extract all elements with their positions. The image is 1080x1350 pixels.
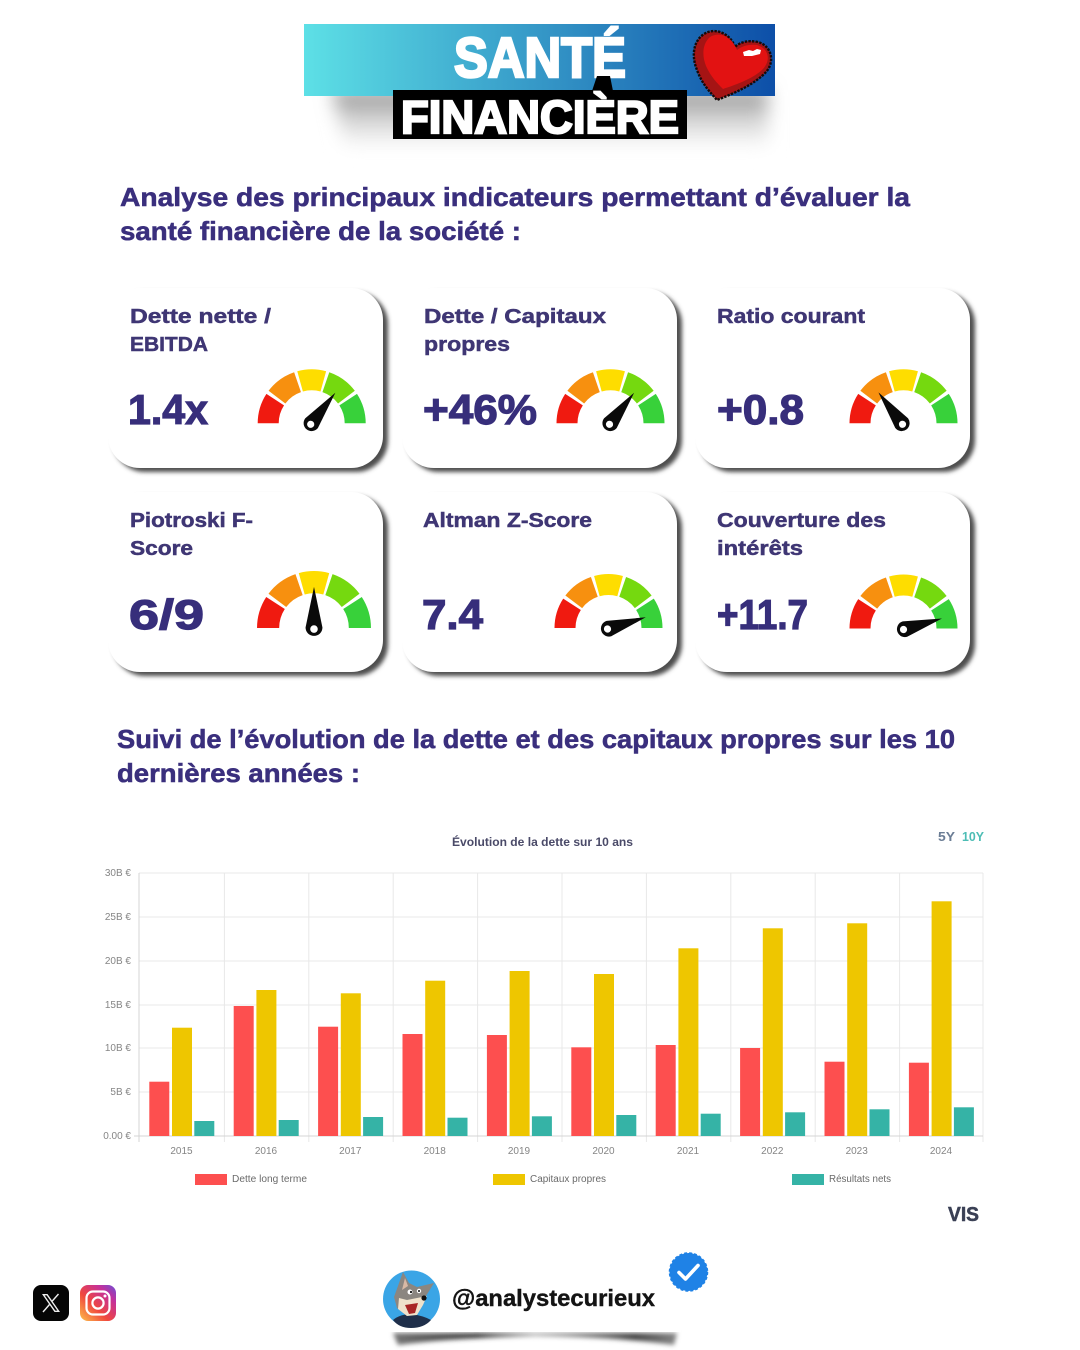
icon: X: [33, 1285, 69, 1321]
panel: Piotroski F-Score: Piotroski F-: [130, 509, 253, 532]
gauge: Dette nette / EBITDA: [268, 380, 355, 434]
heading: analysis intro: Analyse des principaux indicateurs permettant d’évaluer la: [120, 182, 911, 212]
panel: Piotroski F-Score: Score: [130, 537, 193, 560]
y axis labels: 5B €: [110, 1087, 131, 1098]
panel: Piotroski F-Score: 6/9: [129, 591, 204, 638]
panel: Ratio courant: +0.8: [717, 386, 804, 433]
gauge: Piotroski F-Score: [268, 582, 360, 636]
icon: pixel heart: [694, 31, 771, 100]
title word: FINANCIÈRE: FINANCIÈRE: [401, 91, 679, 143]
heading: debt evolution: dernières années :: [117, 758, 360, 788]
x axis labels: 2018: [424, 1146, 446, 1157]
panel: Dette nette / EBITDA: Dette nette /: [130, 305, 271, 328]
panel: Dette nette / EBITDA: 1.4x: [128, 386, 208, 433]
y axis labels: 20B €: [105, 956, 131, 967]
legend: Capitaux propres: [530, 1174, 606, 1185]
y axis labels: [103, 868, 131, 1142]
gauge: Ratio courant: [860, 380, 947, 434]
y axis labels: 30B €: [105, 868, 131, 879]
handle: @analystecurieux: [452, 1285, 655, 1311]
panel: Couverture des intérêts: Couverture des: [717, 509, 886, 532]
legend: [195, 1174, 891, 1185]
panel: Dette / Capitaux propres: [402, 288, 682, 472]
panel: Dette / Capitaux propres: Dette / Capitaux: [424, 305, 607, 328]
panel: Couverture des intérêts: +11.7: [717, 591, 808, 638]
x axis labels: 2016: [255, 1146, 278, 1157]
icon: Instagram: [80, 1285, 116, 1321]
panel: Ratio courant: Ratio courant: [717, 305, 865, 328]
x axis labels: 2022: [761, 1146, 784, 1157]
x axis labels: 2021: [677, 1146, 700, 1157]
y axis labels: 15B €: [105, 1000, 131, 1011]
footer shadow: [393, 1333, 677, 1345]
series: Dette long terme: [149, 1006, 929, 1136]
title banner: [304, 24, 775, 148]
panel: Couverture des intérêts: [695, 492, 975, 676]
ticker label: VIS: [948, 1204, 979, 1226]
panel: Dette nette / EBITDA: EBITDA: [130, 333, 208, 356]
panel: Altman Z-Score: Altman Z-Score: [423, 509, 592, 532]
panel: Dette / Capitaux propres: propres: [424, 333, 510, 356]
title word: SANTÉ: SANTÉ: [454, 26, 626, 90]
series: Résultats nets: [194, 1107, 974, 1136]
x axis labels: 2020: [592, 1146, 615, 1157]
legend: Dette long terme: [232, 1174, 307, 1185]
panel: Couverture des intérêts: intérêts: [717, 537, 803, 560]
period selector: [938, 829, 984, 844]
gauge: Altman Z-Score: [565, 584, 652, 639]
panel: Ratio courant: [695, 288, 975, 472]
heading: debt evolution: [117, 724, 955, 788]
y axis labels: 25B €: [105, 912, 131, 923]
period selector: 10Y: [962, 829, 984, 844]
series: Capitaux propres: [172, 901, 952, 1136]
chart title: Évolution de la dette sur 10 ans: [452, 836, 633, 849]
avatar: wolf: [383, 1270, 440, 1328]
y axis labels: 10B €: [105, 1043, 131, 1054]
gauge: Dette / Capitaux propres: [567, 380, 654, 434]
x axis labels: 2023: [846, 1146, 868, 1157]
period selector: 5Y: [938, 829, 955, 844]
legend: Résultats nets: [829, 1174, 891, 1185]
panel: Altman Z-Score: 7.4: [422, 591, 483, 638]
panel: Piotroski F-Score: [108, 492, 388, 676]
x axis labels: [170, 1146, 953, 1157]
bar chart: debt evolution: [103, 829, 984, 1185]
panel: Dette / Capitaux propres: +46%: [423, 386, 537, 433]
x axis labels: 2017: [339, 1146, 362, 1157]
panel: Altman Z-Score: [402, 492, 682, 676]
icon: verified badge: [670, 1253, 708, 1291]
heading: debt evolution: Suivi de l’évolution de la dette et des capitaux propres sur les 10: [117, 724, 955, 754]
x axis labels: 2015: [170, 1146, 193, 1157]
y axis labels: 0.00 €: [103, 1131, 131, 1142]
panel: Dette nette / EBITDA: [108, 288, 388, 472]
x axis labels: 2024: [930, 1146, 953, 1157]
heading: analysis intro: [120, 182, 911, 246]
gauge: Couverture des intérêts: [860, 585, 947, 639]
heading: analysis intro: santé financière de la société :: [120, 216, 521, 246]
x axis labels: 2019: [508, 1146, 531, 1157]
